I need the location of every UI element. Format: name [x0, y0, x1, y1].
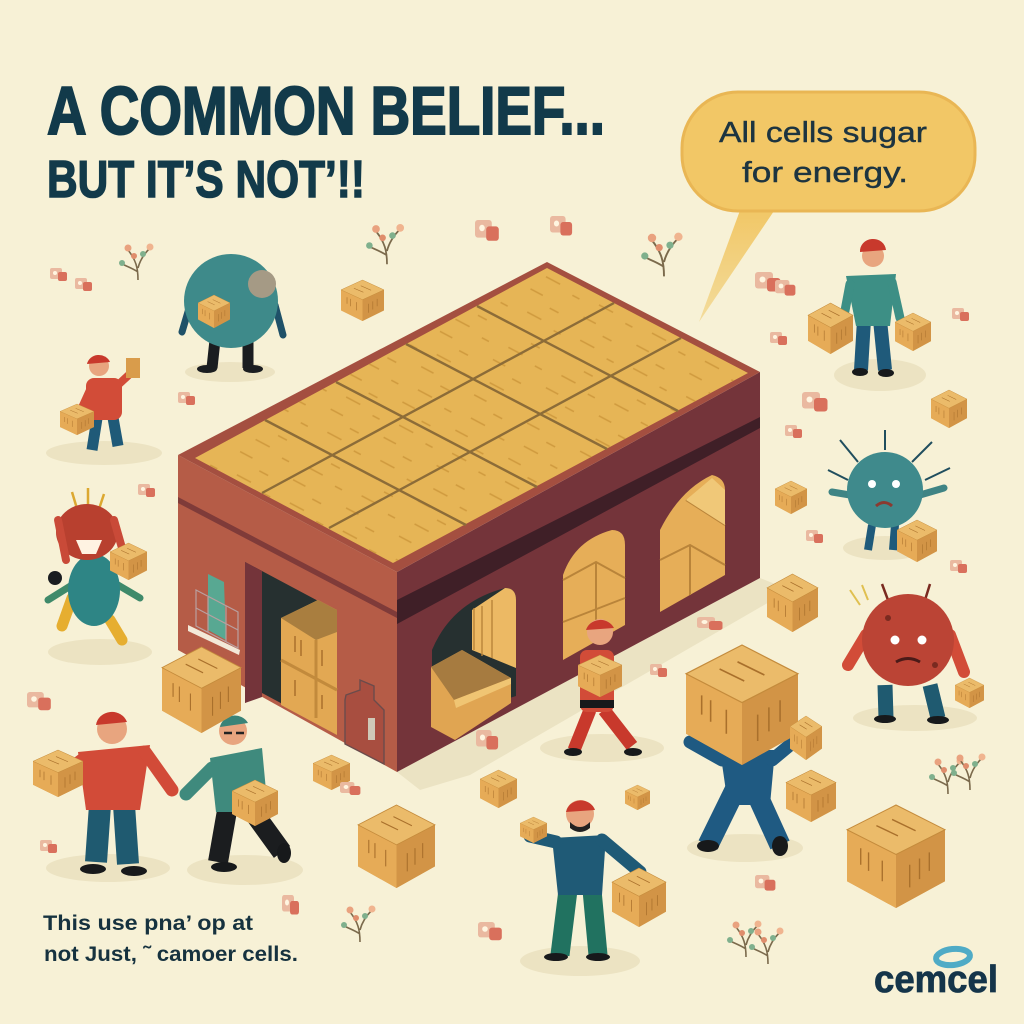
speech bubble: All cells sugar [719, 117, 927, 149]
roof [178, 262, 760, 572]
bottom caption [43, 912, 298, 966]
second arch [563, 530, 625, 660]
title: BUT IT’S NOT’!! [47, 151, 365, 209]
character: worker in navy shirt with boxes [520, 800, 666, 961]
character: teal round cell carrying a box [182, 254, 283, 373]
wall door panel [345, 680, 384, 764]
wall window [188, 574, 240, 655]
speech bubble: for energy. [742, 157, 908, 189]
building right wall [397, 372, 760, 772]
small scattered items [27, 216, 969, 940]
scattered boxes [162, 280, 984, 908]
small scattered plants [119, 224, 986, 964]
character: teal spiky virus cell [828, 430, 950, 550]
character: worker in red shirt with box [60, 355, 140, 450]
character: worker in green shirt with glasses [186, 716, 291, 872]
character: red round cell monster [848, 584, 964, 724]
bottom caption: not Just, ˜ camoer cells. [44, 943, 298, 966]
building left wall [178, 455, 397, 772]
warehouse building [178, 262, 790, 790]
third arch [660, 475, 725, 612]
character: worker in red carrying a box through the arch [564, 619, 642, 756]
main doorway with stacked boxes [245, 562, 337, 735]
logo: cemcel [874, 959, 998, 1001]
building shadow [397, 578, 790, 790]
bottom caption: This use pna’ op at [43, 912, 253, 935]
character: red and teal cell monster [48, 488, 147, 640]
speech bubble [682, 92, 975, 322]
title [47, 73, 605, 209]
title: A COMMON BELIEF... [47, 73, 605, 149]
character: worker in green shirt at top right [844, 239, 900, 377]
wall bands [178, 497, 397, 618]
character: worker carrying the large box [686, 645, 798, 856]
arch with large box [431, 588, 516, 740]
character: worker in red shirt handing a box [33, 712, 172, 876]
shadows under characters [46, 359, 977, 976]
